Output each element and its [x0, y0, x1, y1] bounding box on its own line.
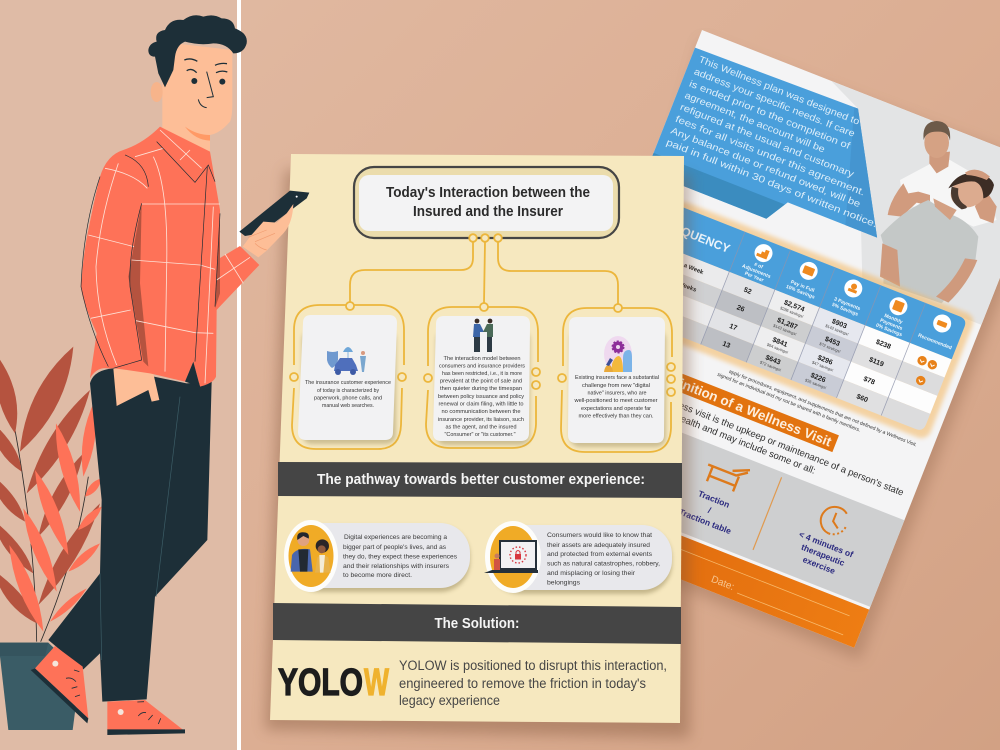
icon: two people [291, 532, 331, 573]
card text: well-positioned to meet customer [573, 398, 658, 404]
header labels: Per Year [744, 271, 764, 284]
pay in full prices: $453 [824, 336, 841, 348]
adjustments per year: 52 [742, 287, 752, 296]
title text: Insured and the Insurer [413, 204, 563, 220]
pot rim [0, 643, 48, 656]
shirt body [81, 127, 220, 387]
plan text: Any balance due or refund owed, will be [669, 126, 862, 210]
title text: Today's Interaction between the [386, 185, 590, 201]
connector nodes [290, 234, 675, 396]
pill text: to become more direct. [343, 572, 412, 579]
adjustments per year: 13 [721, 341, 731, 350]
card text: prevalent at the point of sale and [440, 378, 522, 384]
pill text: they do, they expect these experiences [343, 554, 458, 560]
orange oval [490, 526, 536, 588]
pill text: such as natural catastrophes, robbery, [547, 560, 660, 568]
row labels: Once a Week [667, 257, 705, 276]
orange footer [512, 475, 869, 648]
flyer: today's interaction [265, 154, 690, 738]
forearm and cuff right [215, 246, 259, 312]
clock label: exercise [801, 554, 837, 576]
pocket hand [113, 368, 159, 406]
header labels [739, 258, 955, 357]
band background [278, 462, 682, 498]
orange oval [288, 525, 334, 587]
trouser creases [100, 397, 180, 660]
shirt notch [185, 362, 200, 387]
title box [354, 167, 619, 238]
card background [433, 316, 530, 441]
ear [151, 82, 163, 102]
solution text [399, 658, 667, 708]
pill text: their assets are adequately insured [547, 542, 650, 549]
card text: of today is characterized by [317, 388, 379, 394]
header icon glyphs [756, 246, 949, 330]
therapist hair [923, 121, 950, 141]
savings: $286 savings! [779, 305, 804, 319]
middle frame [428, 307, 538, 366]
header labels: Payments [879, 318, 903, 332]
connector lines [292, 242, 672, 452]
patient neck [933, 198, 957, 220]
card text: native" insurers, who are [588, 390, 646, 396]
banner text: Definition of a Wellness Visit [657, 368, 834, 450]
header labels: 3 Payments [833, 296, 861, 312]
definition text: A Wellness visit is the upkeep or maintenance of a person's state [647, 388, 905, 499]
plan text: address your specific needs. If care [692, 66, 856, 140]
header icon circles [752, 241, 954, 335]
savings [758, 305, 849, 391]
card text: Existing insurers face a substantial [575, 375, 659, 381]
header labels: Adjustments [741, 263, 772, 280]
therapist left arm [888, 183, 930, 217]
card text: expectations and operate far [581, 406, 651, 412]
service divider [753, 477, 782, 550]
neck shadow [185, 127, 210, 141]
card background [298, 315, 397, 440]
title text [386, 185, 590, 220]
savings: $72 savings! [759, 360, 782, 372]
pay in full prices [760, 299, 893, 405]
card text: paperwork, phone calls, and [314, 396, 382, 402]
pill text [547, 532, 660, 586]
pill text: Digital experiences are becoming a [344, 534, 447, 541]
right background panel [241, 0, 1000, 750]
band: solution heading [273, 603, 681, 644]
clock label [790, 529, 855, 580]
therapist neck [929, 152, 950, 173]
header labels: 10% Savings [785, 284, 816, 301]
card text: challenge from new "digital [582, 383, 650, 389]
flyer: wellness plan [512, 30, 1000, 660]
pay in full prices: $2,574 [783, 299, 805, 314]
right frame [563, 308, 672, 366]
left frame [294, 305, 404, 365]
table header background [651, 201, 967, 359]
card: interaction model [433, 316, 530, 441]
header labels: # of [753, 262, 764, 271]
patient shirt [881, 200, 978, 303]
pill background [290, 523, 470, 588]
plan text [664, 54, 911, 230]
plan text: paid in full within 30 days of written notice. [664, 137, 879, 230]
traction label: Traction [697, 488, 731, 510]
portrait oval [485, 521, 541, 593]
hair [148, 15, 247, 87]
plan text: refigured at the usual and customary [678, 102, 856, 180]
patient right arm [936, 258, 977, 303]
card text: then quieter during the timespan [440, 386, 522, 392]
upper body [81, 15, 309, 387]
pill shadow [490, 528, 672, 594]
lower body [31, 368, 212, 735]
adjustments per year [721, 287, 752, 350]
pill text [343, 534, 458, 579]
pricing table [620, 195, 976, 441]
pay in full prices: $1,287 [776, 317, 798, 331]
band background [273, 603, 681, 644]
solution text: engineered to remove the friction in today's [399, 676, 646, 691]
card text: "Consumer" or "its customer." [444, 432, 516, 438]
pay in full prices: $841 [771, 337, 788, 349]
card text: The insurance customer experience [305, 380, 391, 386]
pill text: and their relationships with insurers [343, 563, 450, 570]
plan text: fees for all visits under this agreement. [674, 114, 866, 199]
pot [0, 643, 80, 730]
card text: has been restricted, i.e., it is more [442, 371, 522, 377]
traction label: / [707, 505, 713, 515]
pill: digital experiences [284, 520, 470, 592]
pay in full prices: $903 [831, 318, 848, 330]
plan text: is ended prior to the completion of [687, 79, 852, 152]
solution text: legacy experience [399, 693, 500, 708]
blue text block [646, 45, 919, 259]
traction label: Traction table [678, 507, 733, 536]
savings: $94 savings! [766, 342, 789, 355]
table glow [629, 199, 976, 441]
card text: no communication between the [442, 409, 520, 415]
title frame [354, 167, 619, 238]
rotated flyer sheet [512, 30, 1000, 648]
clock label: < 4 minutes of [798, 529, 855, 560]
shirt plaid lines [88, 130, 250, 383]
header labels: Recommended [917, 333, 953, 351]
pay in full prices: $643 [764, 354, 781, 367]
white divider bar [237, 0, 241, 750]
grey services band [528, 385, 904, 607]
header labels: Monthly [883, 313, 904, 326]
front shoe [107, 700, 185, 735]
flyer sheet [270, 154, 684, 723]
yolow logo: W [364, 662, 389, 704]
photo background [768, 81, 1000, 325]
card text [438, 356, 525, 438]
title card [359, 175, 613, 231]
patient hair [948, 174, 994, 198]
sheet [512, 30, 1000, 648]
header labels: 0% Savings [875, 323, 903, 338]
clock label: therapeutic [800, 542, 846, 568]
savings: $36 savings! [804, 377, 827, 390]
blue darker band [646, 153, 785, 223]
card text: as the agent, and the insured [446, 424, 516, 430]
finger lines [248, 230, 275, 250]
therapist head [924, 127, 949, 158]
header labels: Pay in Full [790, 279, 816, 294]
man figure [31, 15, 309, 735]
trousers [48, 368, 212, 702]
plant [0, 347, 102, 730]
column separators [701, 232, 926, 415]
card text [305, 380, 391, 409]
card text: between policy issuance and policy [438, 394, 524, 400]
pill: asset protection [484, 521, 672, 594]
card text: insurance provider, its liaison, such [438, 417, 524, 423]
icon: clock [817, 503, 852, 538]
savings: $47 savings! [811, 360, 834, 373]
card text: renewal or claim filing, with little to [438, 402, 524, 408]
face features [184, 59, 227, 108]
pill text: belongings [547, 580, 581, 586]
adjustments per year: 17 [728, 323, 738, 332]
orange heading banner [594, 342, 839, 452]
plan text: This Wellness plan was designed to [697, 54, 861, 128]
therapist right forearm [975, 187, 997, 223]
icon: laptop and lock [484, 540, 538, 573]
pill text: and misplacing or losing their [547, 570, 636, 577]
header labels: 5% Savings [831, 302, 859, 318]
left background panel [0, 0, 238, 750]
pay in full prices: $296 [816, 354, 834, 367]
definition text: of health and may include some or all: [664, 408, 817, 477]
band text: The pathway towards better customer experience: [317, 471, 645, 488]
portrait oval [284, 520, 338, 592]
band: pathway heading [278, 462, 682, 498]
pay in full prices: $78 [862, 376, 876, 387]
patient head [946, 172, 990, 212]
hand [243, 204, 293, 257]
icon: traction table [702, 455, 750, 494]
date label: Date: [709, 574, 736, 593]
card: existing insurers [568, 317, 665, 443]
card text: The interaction model between [444, 356, 520, 362]
dark leaves [0, 347, 100, 623]
recommended checks [909, 355, 938, 388]
band text: The Solution: [434, 615, 520, 632]
card text: manual web searches. [322, 403, 374, 409]
solution text: YOLOW is positioned to disrupt this interaction, [399, 658, 667, 673]
pill shadow [290, 526, 470, 592]
icon: car and shield [327, 347, 366, 375]
patient beard [951, 187, 967, 209]
shirt outlines [81, 142, 220, 368]
pill text: Consumers would like to know that [547, 532, 652, 539]
card background [568, 317, 665, 443]
rotated flyer lower content [512, 184, 984, 648]
phone [239, 191, 309, 236]
card: customer experience [298, 315, 397, 440]
pay in full prices: $119 [868, 356, 885, 369]
row labels [656, 255, 705, 294]
savings: $143 savings! [825, 323, 849, 337]
plan text: agreement, the account will be [683, 90, 826, 155]
card text: consumers and insurance providers [439, 364, 525, 370]
card text [573, 375, 659, 420]
shirt shadow [128, 203, 148, 367]
header: frequency: FREQUENCY [657, 215, 732, 256]
yolow logo: YOLO [278, 662, 363, 704]
coral leaves [9, 400, 102, 632]
phone camera [296, 196, 298, 198]
row labels: Every 2 Weeks [656, 273, 698, 294]
traction label [678, 484, 742, 536]
pill text: bigger part of people's lives, and as [343, 544, 447, 551]
stems [15, 430, 88, 642]
savings: $143 savings! [773, 323, 797, 337]
pay in full prices: $226 [809, 372, 827, 384]
footnote: apply for procedures, equipment, and supplements that are not defined by a Wellness Visit. [728, 369, 918, 448]
blue side strip [813, 107, 919, 238]
icon: gear and charts [604, 336, 632, 372]
footer lines [608, 523, 850, 635]
therapist polo [900, 160, 997, 227]
pay in full prices: $238 [875, 339, 892, 351]
footnote: signed for an individual and my not be shared with a family members. [716, 372, 861, 434]
card shadows [302, 330, 666, 447]
savings: $72 savings! [819, 341, 841, 354]
pay in full prices: $60 [855, 393, 869, 404]
back shoe [31, 646, 88, 723]
table body rows [623, 241, 952, 432]
patient left arm [880, 243, 900, 287]
flyer shadow [560, 40, 1000, 660]
adjustments per year: 26 [736, 304, 745, 314]
therapist hand on head [965, 170, 990, 180]
flyer shadow [265, 170, 690, 738]
card text: more effectively than they can. [578, 414, 654, 420]
neck and head [162, 43, 232, 167]
pill text: and protected from external events [547, 551, 653, 558]
pill background [490, 525, 672, 590]
photo: therapist and patient [880, 121, 997, 303]
icon: handshake [473, 319, 493, 352]
